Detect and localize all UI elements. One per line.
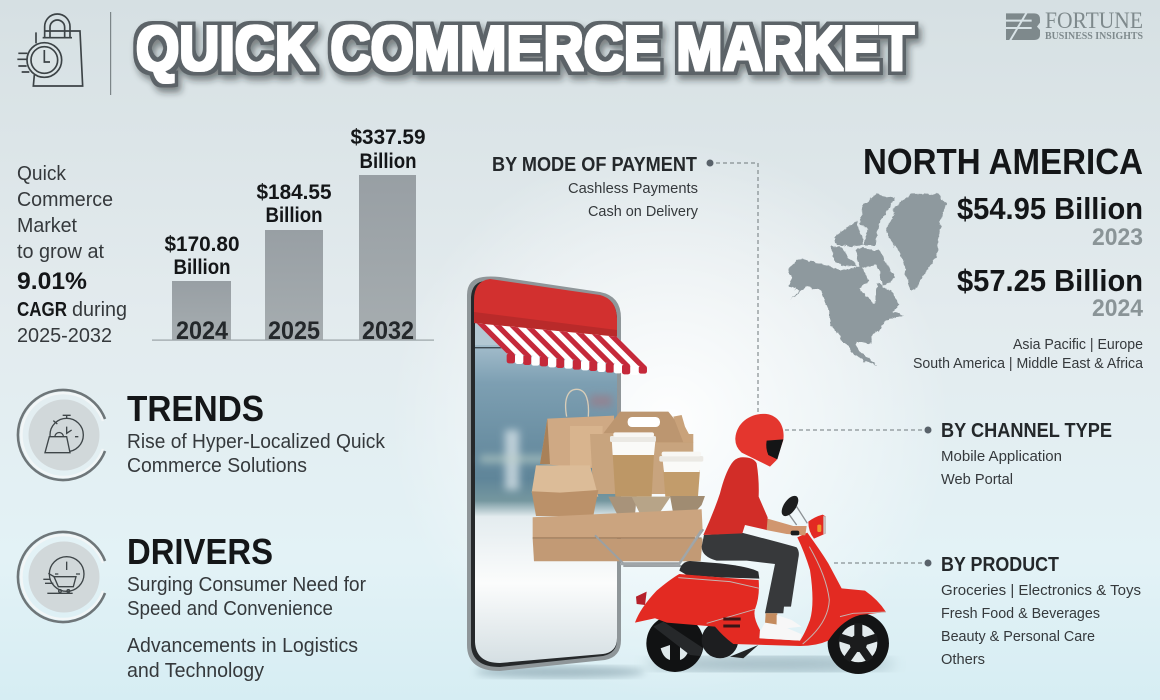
by product [941, 554, 1141, 668]
coffee cups [610, 432, 703, 497]
seat [679, 561, 759, 579]
helmet [735, 414, 784, 467]
by channel type: Mobile Application [941, 448, 1062, 465]
map: north america [787, 193, 946, 365]
text: CAGR summary: Market [17, 215, 77, 237]
connector: product [834, 560, 932, 566]
drivers text: and Technology [127, 660, 264, 682]
2024 value: $57.25 Billion [957, 263, 1143, 298]
engine and exhaust [653, 622, 758, 658]
logo: Fortune Business Insights: FORTUNE [1045, 8, 1143, 33]
awning [477, 323, 647, 375]
icon: shopping bag with clock [17, 14, 83, 86]
headlamp [808, 515, 826, 539]
bar 2032: Billion [360, 150, 416, 173]
bar 2024: 2024 [176, 317, 228, 345]
by channel type: Web Portal [941, 471, 1013, 488]
2024 value [957, 263, 1144, 322]
text: CAGR summary: 2025-2032 [17, 325, 112, 347]
burger box [532, 465, 598, 516]
rack arm [620, 530, 702, 565]
bar 2024 [164, 233, 240, 345]
bar 2032: $337.59 [350, 126, 426, 149]
text: CAGR summary: 9.01% [17, 268, 87, 295]
drivers text: Advancements in Logistics [127, 635, 358, 657]
by product: Beauty & Personal Care [941, 628, 1095, 645]
2024 value: 2024 [1092, 295, 1144, 322]
drivers text: Surging Consumer Need for [127, 574, 366, 596]
2023 value: $54.95 Billion [957, 191, 1143, 226]
front wheel [828, 613, 889, 674]
connector: channel type [785, 426, 932, 434]
shoes [760, 615, 802, 641]
by product: Others [941, 651, 985, 668]
ankle [765, 613, 777, 625]
bar 2025: Billion [266, 204, 322, 227]
rider torso [703, 457, 768, 535]
header divider [110, 12, 111, 95]
logo: Fortune Business Insights [1006, 8, 1143, 42]
bar 2025 [256, 181, 332, 345]
other regions: Asia Pacific | Europe [1013, 336, 1143, 353]
by product: Groceries | Electronics & Toys [941, 582, 1141, 599]
text: CAGR summary: Quick [17, 163, 67, 185]
handled box [590, 412, 693, 494]
logo: Fortune Business Insights: BUSINESS INSIGHTS [1045, 31, 1143, 42]
text: CAGR summary: to grow at [17, 241, 104, 263]
trends text: TRENDS [127, 388, 264, 429]
cup carrier [608, 496, 705, 517]
icon: trends stopwatch [18, 390, 105, 480]
bar 2025: $184.55 [256, 181, 332, 204]
north america heading: NORTH AMERICA [863, 141, 1143, 182]
rider legs [702, 533, 799, 613]
pizza boxes [533, 509, 703, 561]
2023 value [957, 191, 1143, 251]
by mode of payment: BY MODE OF PAYMENT [492, 154, 697, 176]
title: QUICK COMMERCE MARKET [136, 14, 914, 84]
other regions: South America | Middle East & Africa [913, 355, 1144, 372]
delivery rider on red scooter [620, 414, 889, 674]
text: CAGR summary: during [72, 299, 127, 321]
trends text [127, 388, 386, 477]
text: CAGR summary: Commerce [17, 189, 113, 211]
drivers text: DRIVERS [127, 531, 273, 572]
phone with awning [467, 276, 647, 671]
by channel type [941, 420, 1112, 488]
scooter ground shadow [645, 657, 895, 671]
by product: Fresh Food & Beverages [941, 605, 1100, 622]
connector: payment [706, 160, 758, 414]
bar 2024: Billion [174, 256, 230, 279]
scooter body [635, 533, 886, 646]
by channel type: BY CHANNEL TYPE [941, 420, 1112, 442]
drivers text [127, 531, 366, 682]
other regions [913, 336, 1144, 372]
text: CAGR summary [17, 163, 127, 347]
trends text: Commerce Solutions [127, 455, 307, 477]
bar chart: market size [152, 126, 434, 345]
icon: drivers cart and clock [18, 532, 105, 622]
trends text: Rise of Hyper-Localized Quick [127, 431, 386, 453]
by product: BY PRODUCT [941, 554, 1059, 576]
bar 2032 [350, 126, 426, 345]
by mode of payment: Cash on Delivery [588, 203, 698, 220]
rider arm [766, 518, 807, 535]
by mode of payment [492, 154, 698, 220]
metal rack [595, 529, 703, 566]
delivery food boxes [532, 389, 705, 566]
paper bag [540, 389, 617, 470]
handlebar and mirror [778, 493, 807, 535]
2023 value: 2023 [1092, 224, 1143, 251]
rear wheel [646, 615, 704, 672]
by mode of payment: Cashless Payments [568, 180, 698, 197]
bar 2025: 2025 [268, 317, 320, 345]
bar 2032: 2032 [362, 317, 414, 345]
bar 2024: $170.80 [164, 233, 240, 256]
text: CAGR summary: CAGR [17, 299, 67, 321]
phone shadow [475, 666, 645, 678]
drivers text: Speed and Convenience [127, 598, 333, 620]
